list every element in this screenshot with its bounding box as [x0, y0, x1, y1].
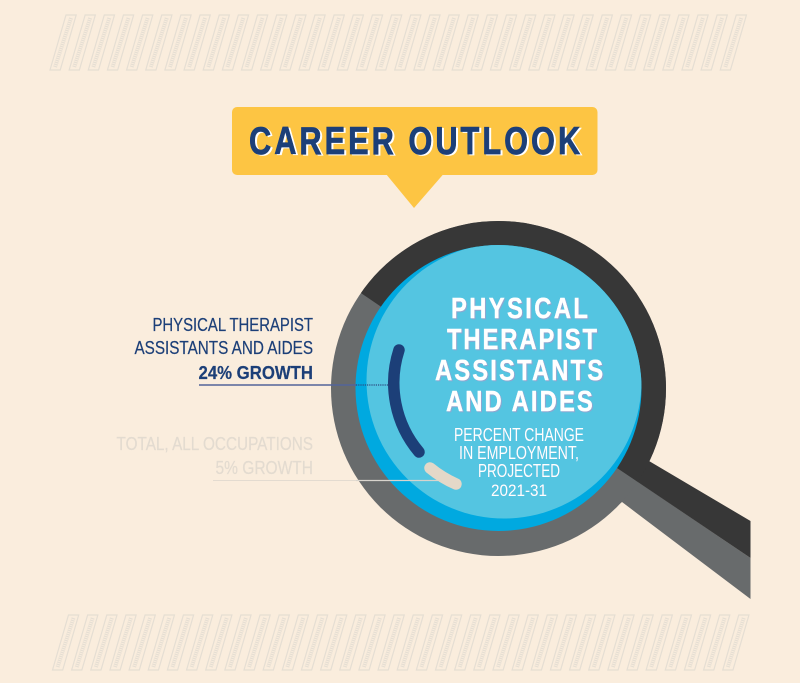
arc: 24% growth — [394, 350, 419, 452]
lens subheading: IN EMPLOYMENT, — [459, 443, 579, 463]
lens subheading: PERCENT CHANGE — [454, 425, 584, 445]
lens subheading: 2021-31 — [491, 481, 547, 500]
lens: light blue face — [366, 244, 642, 518]
label: total all occupations — [116, 434, 313, 478]
frame: dark ring section — [361, 221, 666, 468]
leader line: physical therapist assistants — [199, 384, 398, 386]
label: physical therapist assistants: ASSISTANTS AND AIDES — [134, 338, 313, 358]
lens heading: PHYSICAL — [451, 292, 588, 325]
lens heading: AND AIDES — [446, 385, 593, 418]
lens heading: ASSISTANTS — [435, 354, 603, 387]
magnifying glass — [331, 221, 750, 599]
lens heading — [435, 292, 603, 418]
lens: bright blue rim — [356, 245, 642, 531]
lens subheading: PROJECTED — [478, 461, 560, 481]
label: total all occupations: TOTAL, ALL OCCUPATIONS — [116, 434, 313, 454]
leader line: total all occupations — [213, 480, 438, 482]
lens subheading — [454, 425, 584, 500]
label: physical therapist assistants — [134, 315, 313, 383]
label: physical therapist assistants: PHYSICAL THERAPIST — [152, 315, 313, 335]
label: total all occupations: 5% GROWTH — [216, 458, 313, 478]
handle: dark upper half — [617, 455, 750, 558]
decorative slanted bars: top — [50, 15, 746, 70]
arc: 5% growth — [430, 468, 456, 484]
label: physical therapist assistants: 24% GROWTH — [198, 363, 313, 383]
frame: grey ring — [331, 221, 666, 556]
title banner — [232, 107, 598, 208]
decorative slanted bars: bottom — [52, 615, 749, 670]
lens heading: THERAPIST — [447, 323, 597, 356]
handle: grey lower half — [600, 463, 750, 599]
title: CAREER OUTLOOK — [249, 120, 580, 163]
